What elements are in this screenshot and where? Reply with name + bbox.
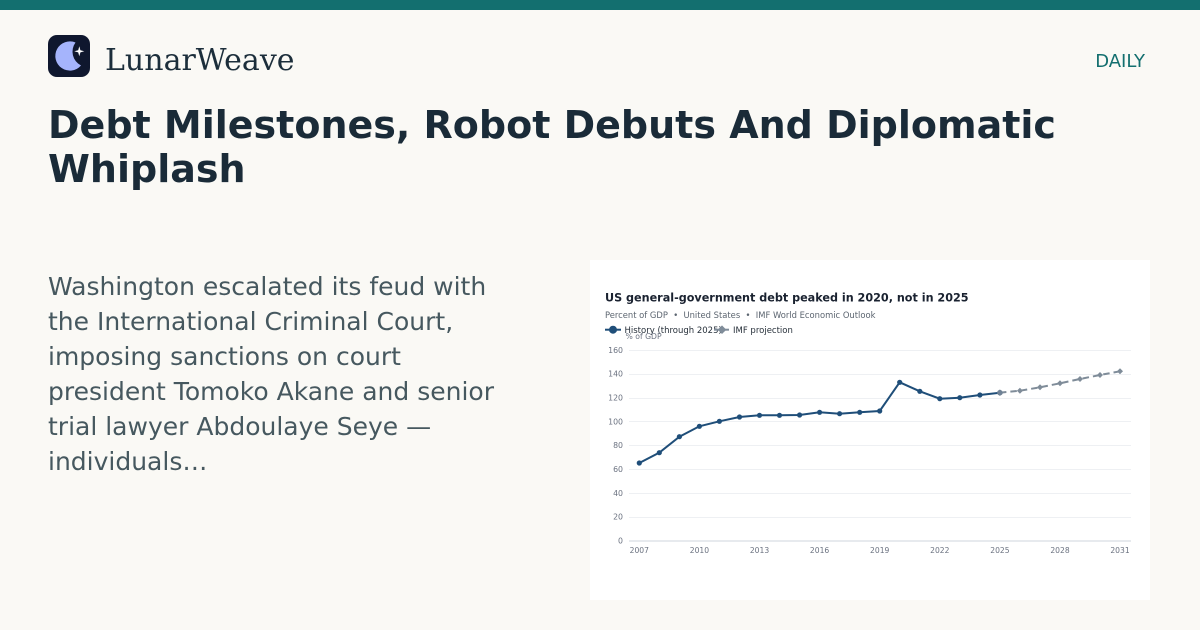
y-axis labels: 80 (613, 441, 623, 450)
axis unit label: % of GDP (626, 332, 662, 341)
icon: moon logo (48, 35, 90, 77)
y-axis labels: 120 (608, 394, 623, 402)
y-axis labels: 60 (613, 465, 623, 474)
series: history (637, 380, 1003, 466)
y-axis labels: 140 (608, 370, 623, 379)
series: IMF projection (997, 368, 1123, 396)
summary text (48, 272, 494, 476)
y-axis labels: 100 (608, 417, 623, 426)
summary text: the International Criminal Court, (48, 307, 453, 336)
x-axis labels: 2013 (750, 546, 769, 555)
chart title: US general-government debt peaked in 2020, not in 2025 (605, 292, 969, 304)
brand name: LunarWeave (105, 43, 295, 78)
summary text: imposing sanctions on court (48, 342, 401, 371)
title: Debt Milestones, Robot Debuts And Diplomatic Whiplash (48, 103, 1056, 191)
chart subtitle: Percent of GDP • United States • IMF World Economic Outlook (605, 310, 876, 320)
x-axis labels: 2016 (810, 546, 829, 555)
y-axis labels: 40 (613, 489, 623, 498)
x-axis labels: 2031 (1110, 546, 1130, 555)
summary text: individuals… (48, 447, 207, 476)
x-axis labels: 2010 (690, 546, 709, 555)
legend: history: History (through 2025) (624, 326, 722, 336)
x-axis labels: 2007 (630, 546, 649, 555)
x-axis labels: 2025 (990, 546, 1010, 555)
y-axis labels: 160 (608, 346, 623, 355)
summary text: Washington escalated its feud with (48, 272, 486, 301)
section label: DAILY (1095, 51, 1145, 72)
x-axis labels (630, 546, 1130, 555)
summary text: trial lawyer Abdoulaye Seye — (48, 412, 431, 441)
summary text: president Tomoko Akane and senior (48, 377, 494, 406)
line chart (608, 346, 1131, 555)
top accent bar (0, 0, 1200, 10)
x-axis labels: 2022 (930, 546, 950, 555)
y-axis labels: 20 (613, 513, 623, 522)
legend: projection: IMF projection (733, 326, 793, 336)
y-axis labels (608, 346, 623, 545)
x-axis labels: 2028 (1050, 546, 1070, 555)
x-axis labels: 2019 (870, 546, 890, 555)
panel: chart card (590, 260, 1150, 600)
y-axis labels: 0 (618, 536, 623, 545)
